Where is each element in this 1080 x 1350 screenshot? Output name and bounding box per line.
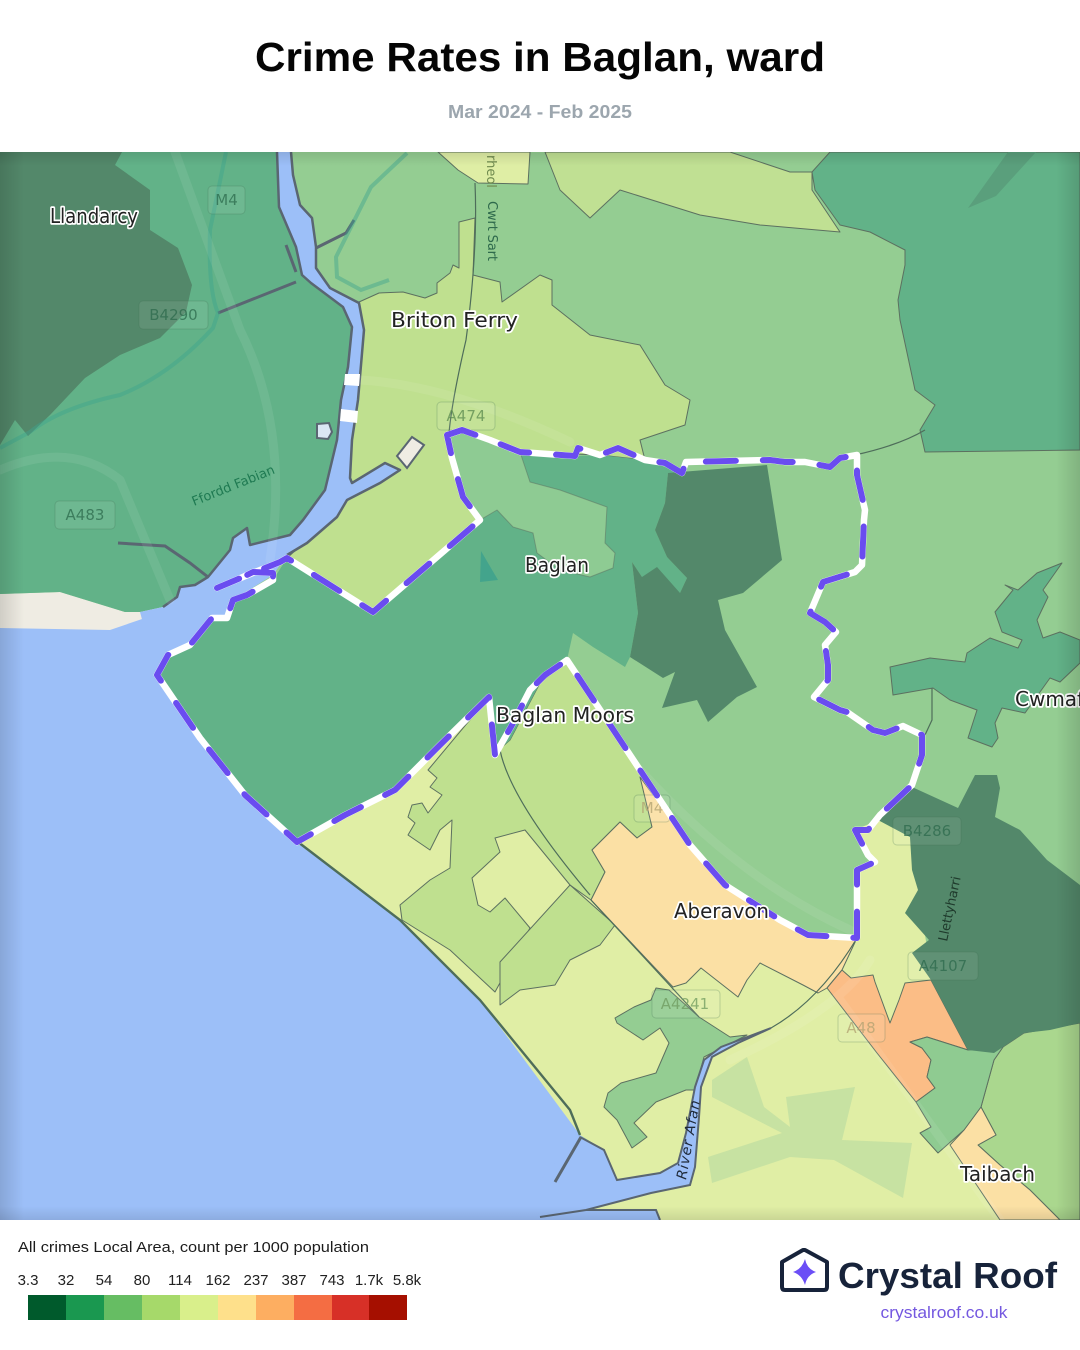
map base: light green areas	[0, 152, 1080, 1220]
river banks	[163, 152, 400, 607]
north-east darker wedge	[968, 152, 1036, 208]
choropleth map	[0, 152, 1080, 1220]
road shields	[55, 186, 978, 1042]
river Afan water	[600, 1040, 742, 1190]
east south light green	[978, 1023, 1080, 1220]
road and river name labels: rheol	[483, 155, 498, 188]
road shields: M4	[215, 191, 238, 209]
place labels: Taibach	[959, 1162, 1035, 1186]
ward dark green forest	[630, 465, 782, 722]
road shields: A483	[66, 506, 104, 524]
legend title: All crimes Local Area, count per 1000 population	[18, 1239, 369, 1256]
Green area beside orange	[910, 1037, 1003, 1153]
road shields: A474	[447, 407, 485, 425]
place labels: Baglan Moors	[496, 703, 634, 727]
logo url: crystalroof.co.uk	[880, 1304, 1008, 1322]
teal triangle	[480, 551, 498, 582]
Taibach peach area	[950, 1107, 1060, 1220]
road shields: A4107	[919, 957, 967, 975]
legend value labels: 5.8k	[393, 1272, 422, 1289]
coast and boundary lines	[118, 183, 932, 1220]
legend colour scale	[28, 1295, 407, 1320]
south-east dark green area	[878, 775, 1080, 1053]
Llandarcy dark green area	[0, 152, 192, 445]
sea	[0, 619, 586, 1220]
place labels: Aberavon	[674, 899, 769, 923]
road and river name labels: River Afan	[674, 1099, 704, 1181]
legend value labels: 3.3	[18, 1272, 38, 1289]
icon: house with star	[782, 1250, 827, 1290]
ward mid green: Baglan	[157, 452, 687, 842]
legend value labels: 743	[319, 1272, 345, 1289]
river and estuary water	[140, 152, 400, 675]
road and river name labels: Cwrt Sart	[484, 201, 499, 261]
subtitle: date range: Mar 2024 - Feb 2025	[448, 101, 632, 122]
legend value labels: 1.7k	[355, 1272, 384, 1289]
dock building	[397, 437, 424, 468]
river bridges	[340, 374, 360, 423]
legend value labels: 54	[96, 1272, 112, 1289]
road shields: M4	[641, 799, 663, 817]
logo: Crystal Roof	[782, 1250, 1058, 1322]
Aberavon peach area	[591, 777, 857, 997]
legend value labels: 387	[281, 1272, 307, 1289]
faint roads	[0, 152, 1000, 1220]
road shields: A48	[846, 1019, 876, 1037]
place labels: Briton Ferry	[391, 308, 518, 332]
yellow-green blob south	[500, 885, 615, 1005]
north yellow-green: Briton Ferry	[287, 218, 690, 612]
top yellow-green area	[545, 152, 840, 232]
road and river name labels: Llettyharri	[936, 875, 965, 943]
place labels: Llandarcy	[50, 204, 138, 228]
steelworks tint	[708, 1057, 912, 1198]
north-east mid green area	[812, 152, 1080, 452]
west land: mid green	[0, 152, 352, 612]
legend value labels: 237	[243, 1272, 269, 1289]
title: Crime Rates in Baglan, ward	[255, 34, 825, 80]
Baglan lighter neighbourhood	[482, 455, 616, 578]
top pale yellow area	[438, 152, 530, 184]
map edge shading	[0, 152, 1080, 1220]
Orange high crime area	[827, 970, 968, 1102]
road shields: A4241	[661, 995, 709, 1013]
south pale yellow area	[302, 725, 1000, 1220]
streams	[0, 152, 407, 448]
legend value labels	[18, 1272, 422, 1289]
road shields: B4286	[903, 822, 951, 840]
ward boundary: white line with purple dashes	[157, 430, 922, 938]
legend	[18, 1239, 422, 1320]
legend value labels: 80	[134, 1272, 150, 1289]
place labels	[50, 204, 1080, 1186]
legend value labels: 32	[58, 1272, 74, 1289]
islet	[317, 423, 332, 439]
beach	[0, 592, 170, 630]
place labels: Baglan	[525, 553, 589, 577]
south river green area	[604, 988, 747, 1148]
road and river name labels: Ffordd Fabian	[190, 463, 277, 510]
legend value labels: 162	[205, 1272, 231, 1289]
Baglan Moors yellow-green area	[400, 660, 652, 992]
road shields: B4290	[149, 306, 198, 324]
road and river name labels	[190, 155, 965, 1181]
Cwmafan mid green area	[890, 563, 1080, 747]
legend value labels: 114	[168, 1272, 192, 1289]
logo wordmark: Crystal Roof	[838, 1255, 1058, 1296]
